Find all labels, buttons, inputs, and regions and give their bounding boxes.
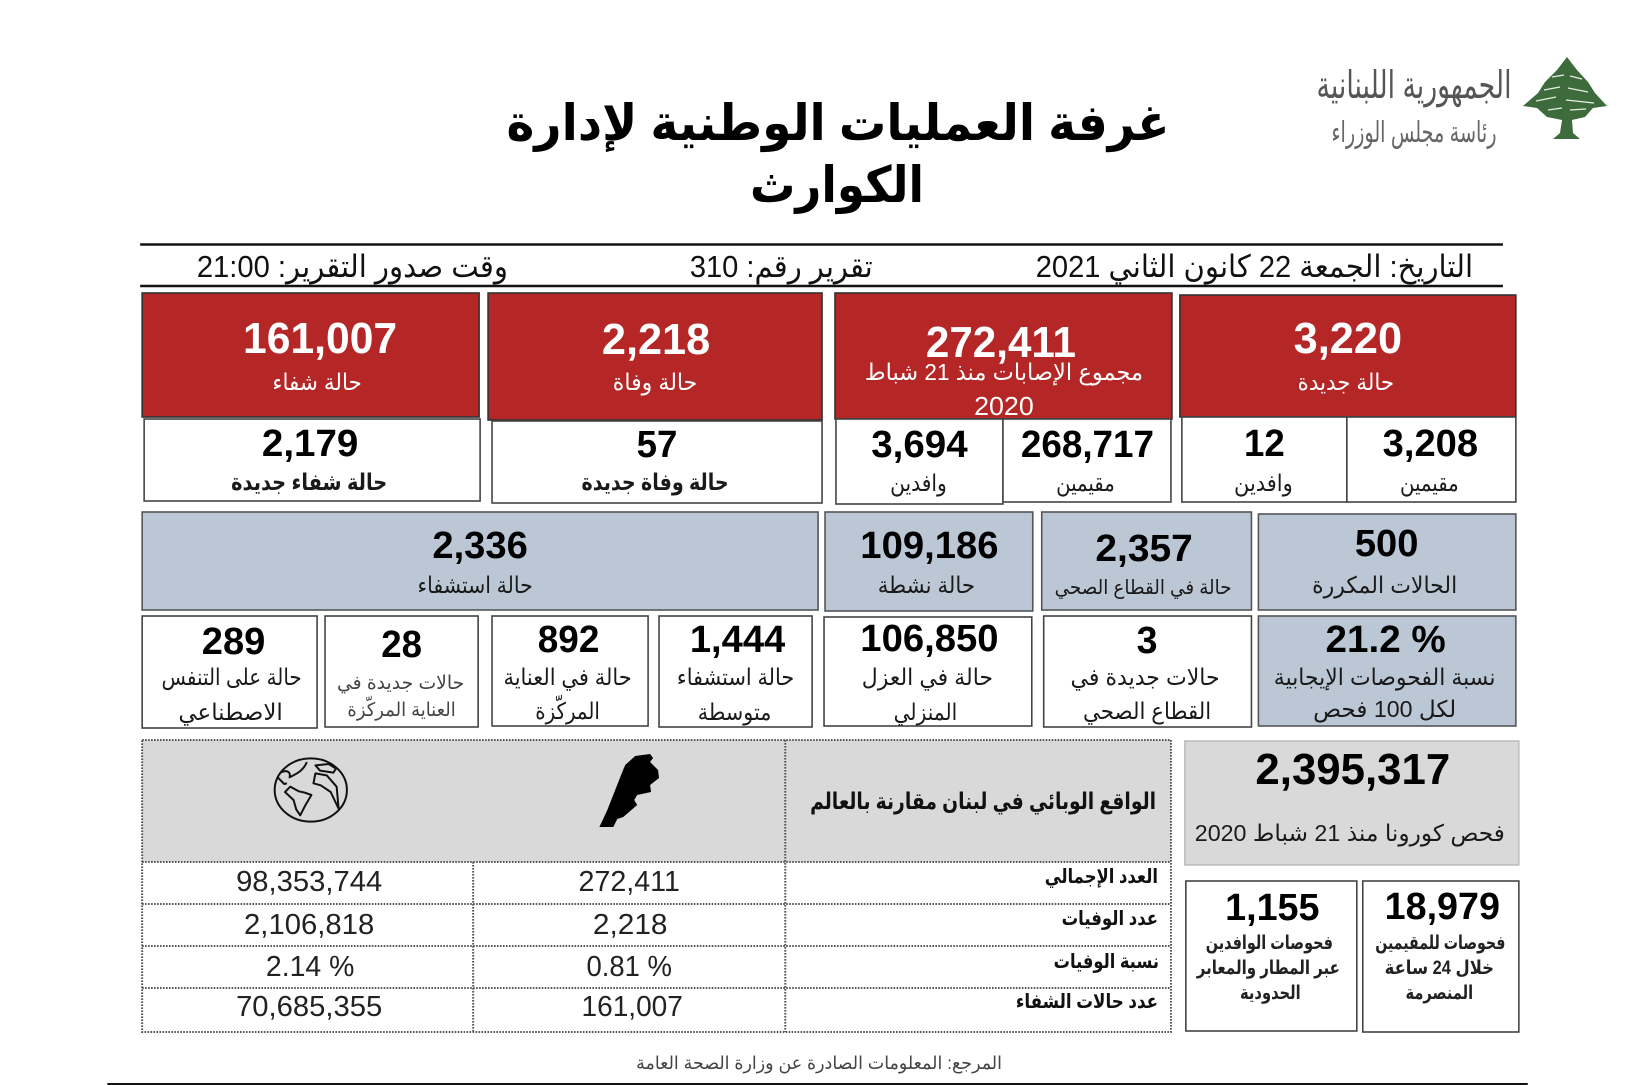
label line 3: المنصرمة: [1406, 983, 1473, 1004]
panel: moderate hospital: [659, 616, 812, 727]
label: حالة جديدة: [1298, 369, 1394, 395]
label line 1: فحوصات الوافدين: [1206, 933, 1333, 954]
panel: new cases: [1180, 295, 1516, 417]
report time: وقت صدور التقرير: 21:00: [197, 249, 508, 285]
label line 2: خلال 24 ساعة: [1385, 958, 1494, 979]
title line 2: الكوارث: [750, 157, 924, 215]
row: deaths: عدد الوفيات: [1062, 908, 1158, 930]
icon: cedar tree: [1523, 57, 1607, 139]
label line 1: حالات جديدة في: [337, 673, 464, 694]
label line 2: القطاع الصحي: [1083, 698, 1211, 725]
logo text line 1: الجمهورية اللبنانية: [1316, 65, 1512, 108]
row: deaths: 2,106,818: [244, 909, 374, 941]
number: 268,717: [1021, 424, 1154, 466]
number: 18,979: [1385, 886, 1500, 928]
panel: positivity rate: [1258, 616, 1516, 726]
label line 2: العناية المركّزة: [347, 697, 456, 721]
number: 272,411: [926, 318, 1076, 367]
number: 21.2 %: [1326, 619, 1446, 661]
label line 2: المنزلي: [894, 699, 957, 726]
row: recoveries: 70,685,355: [236, 991, 382, 1023]
label line 2: 2020: [974, 393, 1034, 421]
number: 2,218: [602, 315, 710, 364]
row: recoveries: [236, 991, 1158, 1023]
panel: new health sector cases: [1044, 616, 1251, 727]
label line 2: لكل 100 فحص: [1313, 696, 1456, 723]
label line 2: المركّزة: [535, 695, 600, 725]
panel: new deaths: [492, 421, 822, 503]
number: 3,694: [871, 424, 968, 466]
panel: arrivals tests: [1186, 881, 1357, 1031]
label line 1: حالات جديدة في: [1071, 664, 1220, 691]
number: 289: [202, 621, 265, 663]
row: total: العدد الإجمالي: [1045, 866, 1158, 889]
label: حالة شفاء: [272, 369, 362, 395]
label line 3: الحدودية: [1240, 983, 1301, 1004]
panel: total cases: [835, 293, 1172, 421]
panel: ventilated: [142, 616, 317, 728]
panel: residents tests: [1363, 881, 1519, 1032]
label: الحالات المكررة: [1312, 572, 1457, 599]
number: 2,357: [1095, 528, 1193, 570]
number: 109,186: [860, 525, 998, 567]
number: 1,155: [1225, 887, 1320, 929]
panel: total arrivals: [836, 419, 1003, 504]
number: 2,336: [432, 525, 528, 567]
label: حالة في القطاع الصحي: [1055, 577, 1232, 600]
number: 106,850: [860, 618, 998, 660]
panel: health sector cases: [1042, 512, 1251, 610]
table heading: الواقع الوبائي في لبنان مقارنة بالعالم: [810, 788, 1156, 815]
label line 1: نسبة الفحوصات الإيجابية: [1274, 664, 1495, 691]
label line 1: حالة في العناية: [503, 664, 632, 691]
panel: total residents: [1003, 419, 1171, 502]
row: fatality rate: [266, 951, 1159, 983]
row: recoveries: 161,007: [581, 991, 683, 1023]
label line 1: حالة على التنفس: [162, 664, 302, 691]
logo: Lebanese Republic, Presidency of the Council of Ministers: [1316, 57, 1607, 149]
title line 1: غرفة العمليات الوطنية لإدارة: [506, 95, 1170, 153]
source note: المرجع: المعلومات الصادرة عن وزارة الصحة العامة: [636, 1053, 1002, 1074]
row: deaths: 2,218: [593, 909, 667, 941]
panel: hospitalised: [142, 512, 818, 610]
label: وافدين: [1234, 470, 1293, 497]
panel: home isolation: [824, 617, 1032, 726]
number: 1,444: [690, 619, 785, 661]
row: total: 272,411: [579, 866, 680, 898]
number: 3: [1137, 620, 1158, 662]
panel: new arrivals: [1182, 417, 1347, 502]
row: fatality rate: 2.14 %: [266, 951, 354, 983]
number: 3,208: [1383, 423, 1478, 465]
panel: repeated cases: [1258, 514, 1516, 610]
label line 2: متوسطة: [698, 699, 771, 726]
row: recoveries: عدد حالات الشفاء: [1016, 991, 1158, 1013]
label: حالة وفاة: [613, 369, 697, 396]
panel: total tests: [1185, 741, 1519, 865]
label line 1: مجموع الإصابات منذ 21 شباط: [865, 359, 1143, 386]
panel: ICU: [492, 616, 648, 726]
label line 1: حالة في العزل: [862, 664, 993, 691]
icon: Lebanon map: [599, 754, 659, 827]
label line 2: عبر المطار والمعابر: [1196, 958, 1340, 979]
label: وافدين: [890, 470, 947, 497]
row: fatality rate: 0.81 %: [586, 951, 672, 983]
number: 2,395,317: [1255, 745, 1450, 794]
panel: deaths: [488, 293, 822, 420]
label line 1: فحوصات للمقيمين: [1375, 933, 1505, 954]
label: حالة شفاء جديدة: [231, 469, 387, 495]
logo text line 2: رئاسة مجلس الوزراء: [1332, 117, 1496, 149]
number: 500: [1355, 523, 1418, 565]
number: 892: [538, 619, 599, 661]
row: total: 98,353,744: [236, 866, 382, 898]
number: 161,007: [243, 314, 397, 363]
report number: تقرير رقم: 310: [690, 249, 873, 285]
number: 28: [381, 624, 422, 666]
number: 3,220: [1294, 314, 1402, 363]
number: 57: [637, 424, 677, 466]
comparison table: Lebanon vs world: [142, 740, 1171, 1032]
label: مقيمين: [1056, 470, 1115, 497]
number: 12: [1244, 423, 1285, 465]
panel: new ICU: [325, 616, 478, 727]
label: حالة استشفاء: [417, 572, 533, 598]
row: fatality rate: نسبة الوفيات: [1054, 951, 1159, 973]
row: deaths: [244, 908, 1158, 941]
panel: new recoveries: [144, 419, 480, 501]
panel: active cases: [825, 512, 1033, 611]
panel: recoveries: [142, 293, 479, 417]
row: total: [236, 866, 1158, 898]
label: حالة وفاة جديدة: [581, 469, 729, 496]
report info bar: [140, 244, 1503, 286]
label line 2: الاصطناعي: [178, 699, 283, 726]
date: التاريخ: الجمعة 22 كانون الثاني 2021: [1036, 249, 1473, 285]
title: [506, 95, 1170, 215]
label: مقيمين: [1400, 470, 1459, 497]
label line 1: حالة استشفاء: [677, 664, 794, 690]
label: حالة نشطة: [878, 572, 975, 598]
label: فحص كورونا منذ 21 شباط 2020: [1195, 820, 1505, 847]
number: 2,179: [262, 423, 358, 465]
report body: [107, 244, 1528, 1084]
panel: new residents: [1347, 417, 1516, 502]
icon: globe: [275, 758, 347, 822]
